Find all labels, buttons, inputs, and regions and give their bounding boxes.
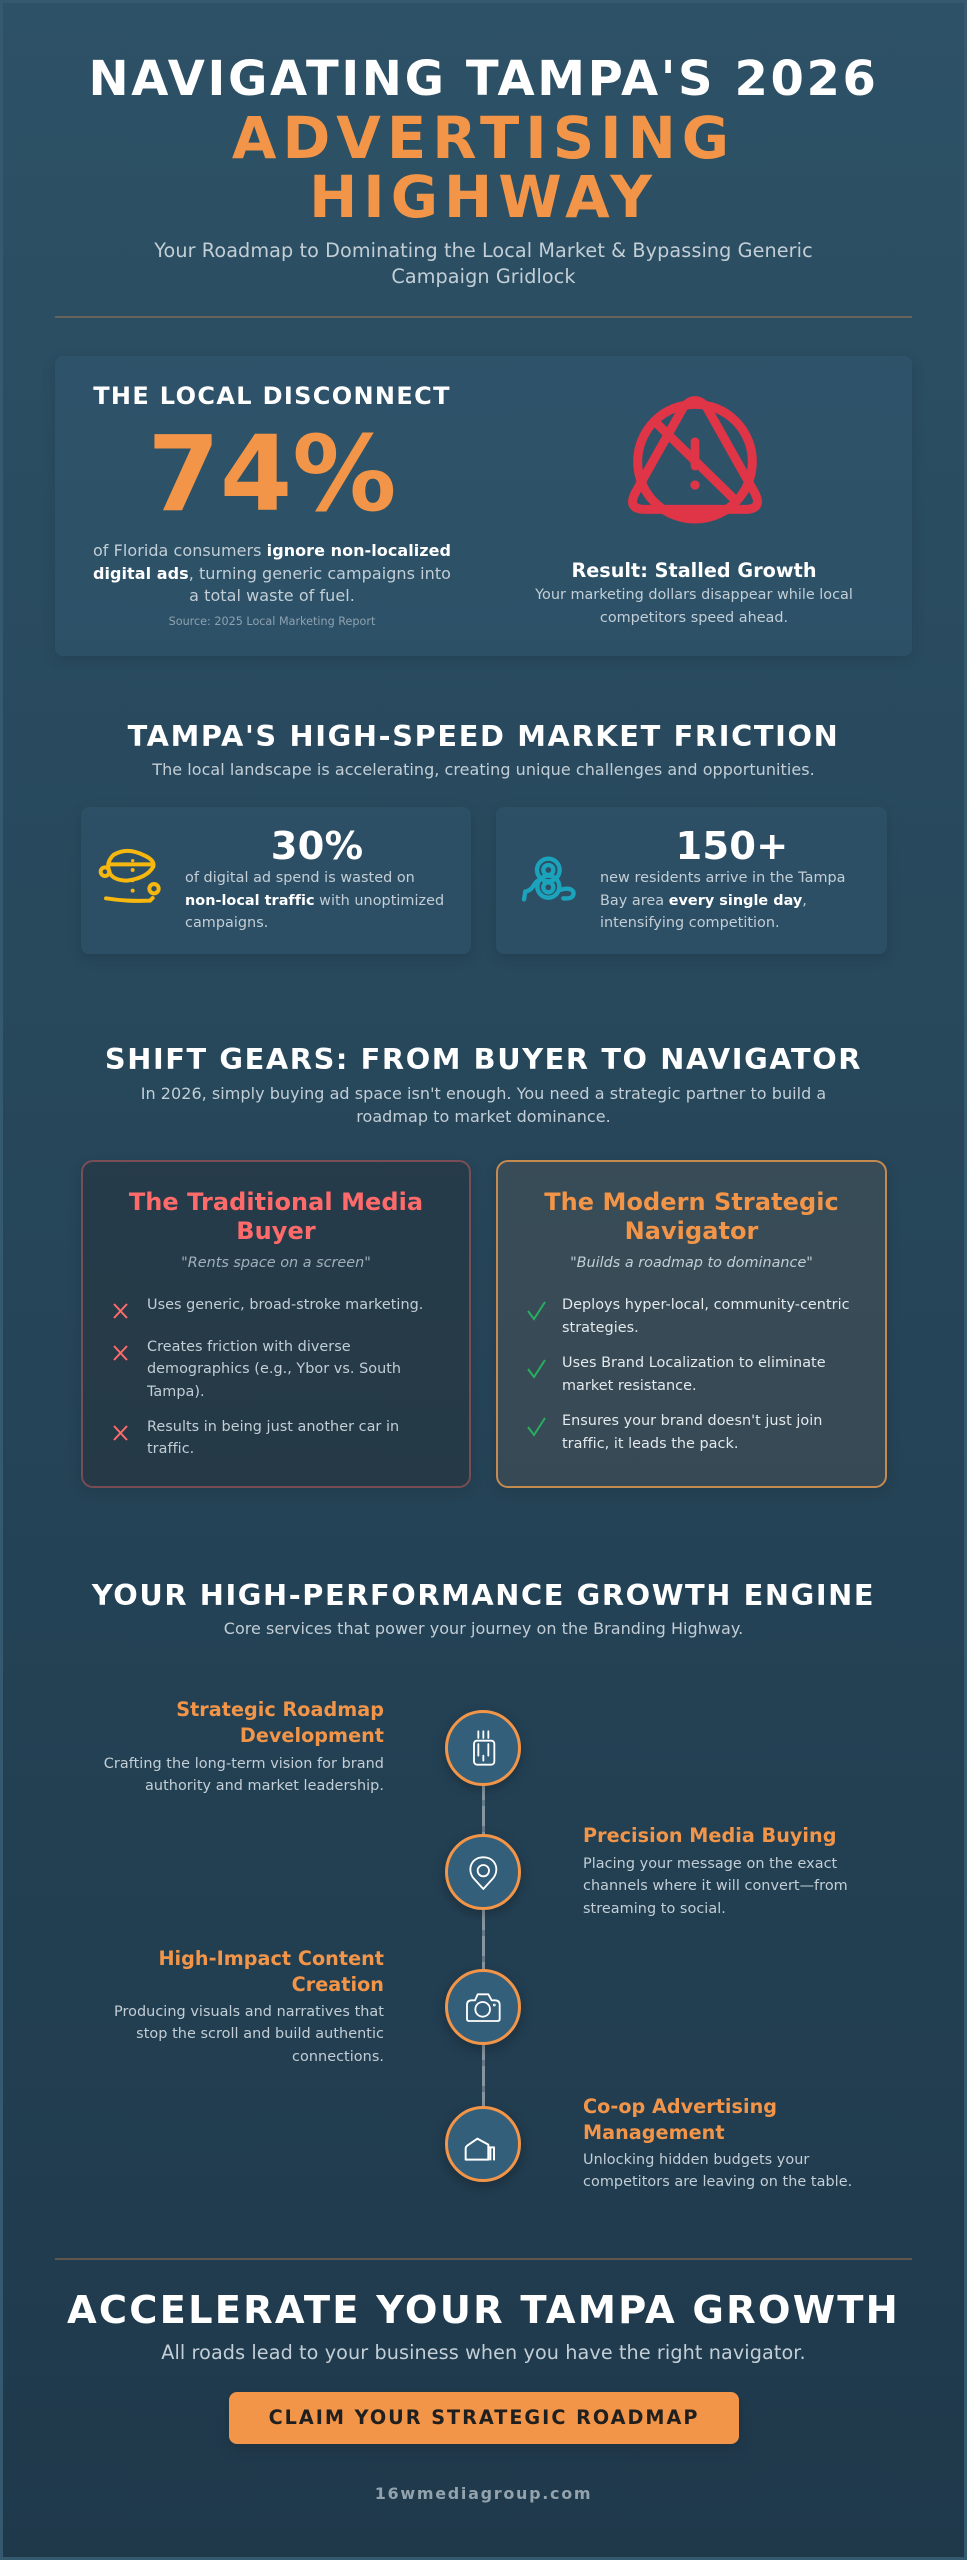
list item: market resistance.	[562, 1378, 697, 1394]
list item: traffic, it leads the pack.	[562, 1436, 738, 1452]
stat description: of Florida consumers ignore non-localized	[93, 541, 451, 560]
service title	[583, 2095, 777, 2144]
service description: authority and market leadership.	[145, 1778, 384, 1794]
timeline node: location pin	[445, 1834, 521, 1910]
service title	[158, 1947, 384, 1996]
list item: Results in being just another car in	[147, 1418, 399, 1434]
service description	[104, 1756, 384, 1794]
icon: people	[522, 856, 576, 902]
header	[55, 51, 912, 318]
intro text: In 2026, simply buying ad space isn't enough. You need a strategic partner to build a	[141, 1084, 826, 1103]
service title: Co-op Advertising	[583, 2095, 777, 2118]
icon: check	[527, 1418, 546, 1437]
service description: Crafting the long-term vision for brand	[104, 1756, 384, 1772]
service description: competitors are leaving on the table.	[583, 2174, 852, 2190]
list item: traffic.	[147, 1441, 194, 1457]
section: growth engine heading	[92, 1578, 875, 1638]
intro text: roadmap to market dominance.	[356, 1107, 611, 1126]
icon: cross	[113, 1425, 128, 1441]
section: shift gears	[105, 1042, 862, 1126]
subtitle: Your Roadmap to Dominating the Local Market & Bypassing Generic	[154, 239, 813, 262]
heading: SHIFT GEARS: FROM BUYER TO NAVIGATOR	[105, 1042, 862, 1076]
intro text: Core services that power your journey on the Branding Highway.	[224, 1619, 743, 1638]
list item	[562, 1297, 850, 1336]
service title: Creation	[292, 1972, 384, 1996]
service title: Precision Media Buying	[583, 1824, 836, 1847]
stat description	[93, 541, 451, 605]
stat text: Bay area every single day,	[600, 893, 807, 909]
list item: demographics (e.g., Ybor vs. South	[147, 1361, 401, 1377]
service description: connections.	[292, 2049, 384, 2065]
service description	[583, 2152, 852, 2190]
stat number: 150+	[675, 824, 789, 868]
service: strategic roadmap	[104, 1698, 384, 1794]
title highlight: HIGHWAY	[309, 164, 658, 230]
panel title	[544, 1188, 839, 1245]
cta button	[229, 2392, 739, 2444]
service title: Development	[240, 1724, 384, 1746]
heading: the local disconnect: THE LOCAL DISCONNECT	[93, 382, 451, 410]
service description: Producing visuals and narratives that	[114, 2004, 384, 2020]
service description: channels where it will convert—from	[583, 1878, 848, 1894]
list item: Deploys hyper-local, community-centric	[562, 1297, 850, 1313]
result description: Your marketing dollars disappear while local	[535, 587, 853, 603]
source note: Source: 2025 Local Marketing Report	[169, 615, 375, 628]
stat text: campaigns.	[185, 915, 268, 931]
service description: Placing your message on the exact	[583, 1856, 837, 1872]
website: 16wmediagroup.com	[375, 2484, 592, 2503]
result description: competitors speed ahead.	[600, 610, 788, 626]
stat card: 150+	[496, 807, 887, 954]
intro text	[141, 1084, 826, 1126]
icon: cross	[113, 1303, 128, 1319]
service description: streaming to social.	[583, 1901, 726, 1917]
service title: High-Impact Content	[158, 1947, 384, 1970]
cta text: All roads lead to your business when you have the right navigator.	[161, 2341, 806, 2364]
list item: Uses generic, broad-stroke marketing.	[147, 1297, 423, 1313]
timeline node: camera	[445, 1969, 521, 2045]
timeline spine	[482, 1780, 485, 2120]
list item	[562, 1413, 822, 1452]
list item: Creates friction with diverse	[147, 1338, 351, 1354]
divider	[55, 316, 912, 318]
panel: traditional media buyer	[81, 1160, 471, 1488]
stat text	[185, 870, 444, 931]
quote: "Rents space on a screen"	[181, 1255, 371, 1271]
service description	[583, 1856, 848, 1917]
stat text: non-local traffic with unoptimized	[185, 893, 444, 909]
section: market friction	[128, 719, 839, 779]
panel title: Buyer	[236, 1217, 316, 1245]
panel title: The Traditional Media	[129, 1188, 423, 1216]
result heading: Result: Stalled Growth	[571, 558, 817, 582]
timeline node: co-op house	[445, 2106, 521, 2182]
cta heading: ACCELERATE YOUR TAMPA GROWTH	[67, 2288, 900, 2333]
title highlight: ADVERTISING	[232, 105, 735, 172]
cta button: CLAIM YOUR STRATEGIC ROADMAP	[269, 2406, 699, 2429]
divider	[55, 2258, 912, 2260]
stat number: 30%	[271, 824, 363, 868]
icon: check	[527, 1360, 546, 1379]
stat text: new residents arrive in the Tampa	[600, 870, 846, 886]
service: co-op advertising	[583, 2095, 852, 2190]
stat text	[600, 870, 846, 931]
quote: "Builds a roadmap to dominance"	[570, 1255, 813, 1271]
icon: check	[527, 1302, 546, 1321]
service description: Unlocking hidden budgets your	[583, 2152, 809, 2168]
panel: local disconnect	[55, 356, 912, 656]
footer call to action	[55, 2258, 912, 2503]
result description	[535, 587, 853, 626]
service title	[176, 1698, 384, 1746]
service: precision media buying	[583, 1824, 848, 1917]
list item: strategies.	[562, 1320, 639, 1336]
list item	[147, 1418, 399, 1457]
panel title	[129, 1188, 423, 1245]
subtitle: Campaign Gridlock	[391, 265, 576, 288]
stat description: a total waste of fuel.	[189, 586, 355, 605]
service title: Management	[583, 2120, 725, 2144]
list item	[146, 1338, 401, 1400]
list item: Tampa).	[147, 1384, 205, 1400]
service description: stop the scroll and build authentic	[136, 2026, 384, 2042]
title line 1: NAVIGATING TAMPA'S 2026	[88, 51, 878, 107]
list item: Ensures your brand doesn't just join	[562, 1413, 822, 1429]
list item	[562, 1355, 826, 1394]
icon: cross	[113, 1345, 128, 1361]
stat description: digital ads, turning generic campaigns into	[93, 564, 451, 583]
icon: warning stalled	[628, 396, 762, 524]
panel: modern strategic navigator	[496, 1160, 887, 1488]
timeline node: roadmap	[445, 1710, 521, 1786]
service title: Strategic Roadmap	[176, 1698, 384, 1721]
title highlight	[232, 105, 735, 230]
panel title: Navigator	[625, 1217, 758, 1245]
intro text: The local landscape is accelerating, creating unique challenges and opportunities.	[152, 760, 815, 779]
heading: YOUR HIGH-PERFORMANCE GROWTH ENGINE	[92, 1578, 875, 1612]
icon: route map	[98, 848, 161, 903]
service description	[114, 2004, 384, 2065]
stat card: 30%	[81, 807, 471, 954]
list item: Uses Brand Localization to eliminate	[562, 1355, 826, 1371]
subtitle	[154, 239, 813, 288]
heading: TAMPA'S HIGH-SPEED MARKET FRICTION	[128, 719, 839, 753]
panel title: The Modern Strategic	[544, 1188, 839, 1216]
stat text: intensifying competition.	[600, 915, 780, 931]
service: content creation	[114, 1947, 384, 2065]
stat text: of digital ad spend is wasted on	[185, 870, 415, 886]
big stat 74%: 74%	[148, 413, 396, 535]
